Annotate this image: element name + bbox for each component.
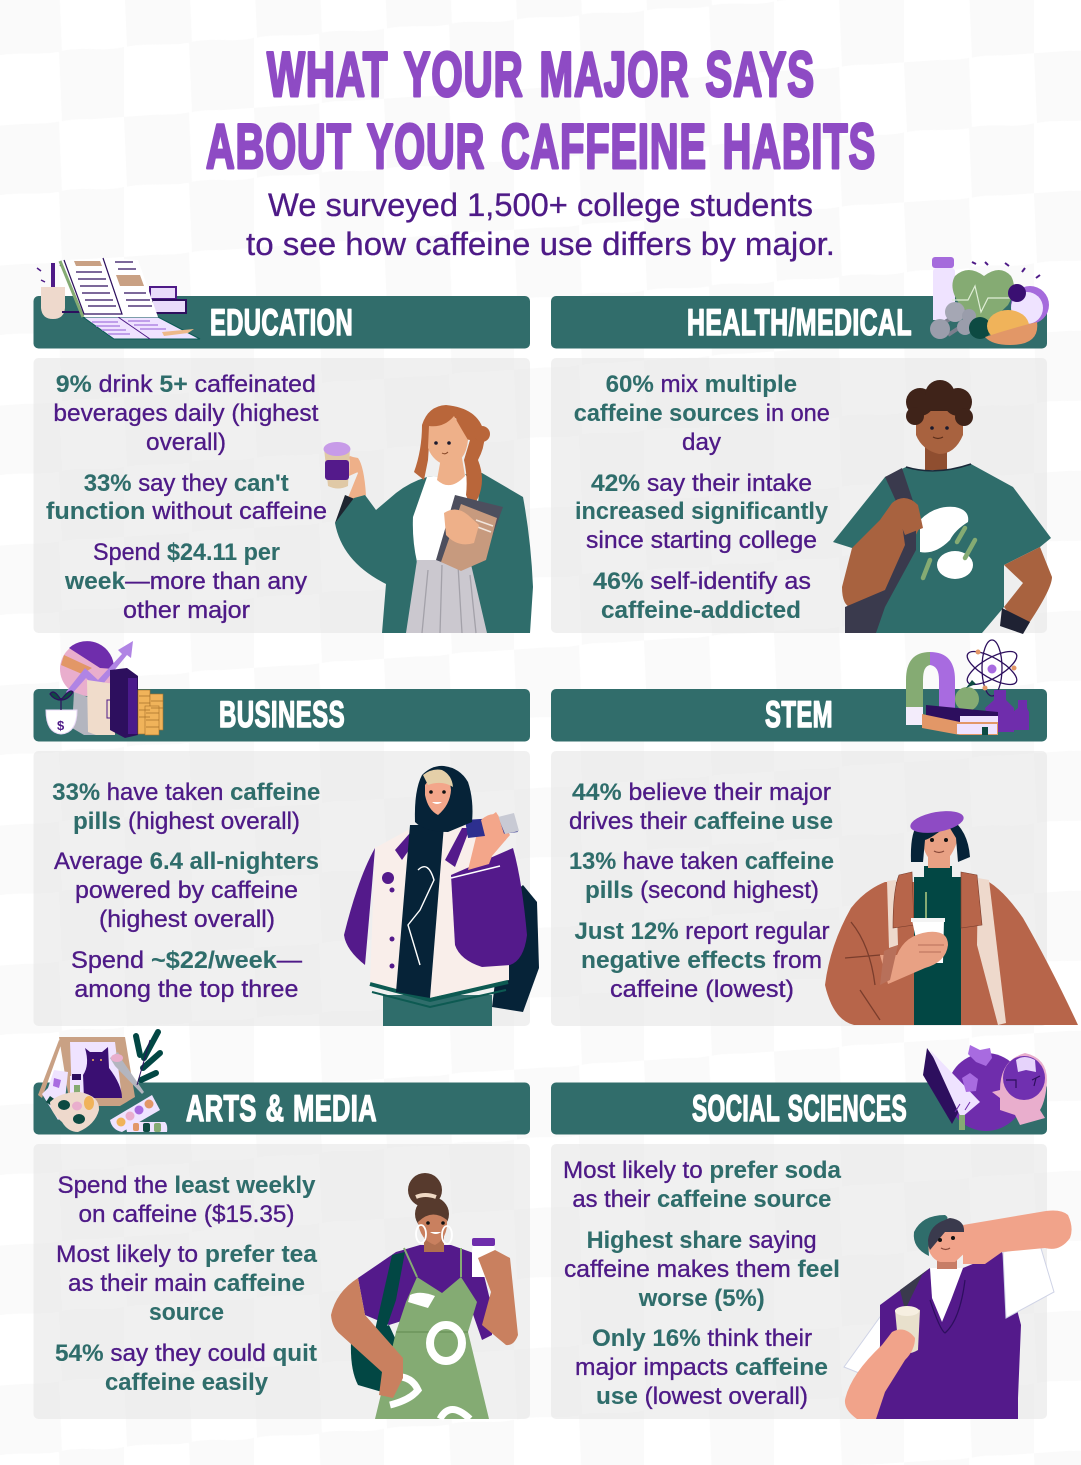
text: arts stats: on caffeine ($15.35) [78, 1201, 294, 1228]
body card [551, 1144, 1047, 1419]
text: education stats: Spend $24.11 per [93, 539, 280, 566]
text: social sciences stats: Highest share saying [587, 1227, 817, 1254]
heading: SOCIAL SCIENCES [692, 1088, 907, 1129]
panel: social sciences [551, 1045, 1072, 1419]
text: social sciences stats: use (lowest overall) [596, 1383, 808, 1410]
text: health stats: 46% self-identify as [593, 568, 811, 595]
text: education stats: 9% drink 5+ caffeinated [56, 371, 316, 398]
text: stem stats [569, 779, 834, 1003]
text: business stats: (highest overall) [99, 906, 275, 933]
icon: student with coffee [324, 405, 533, 633]
body card [34, 358, 530, 633]
title [206, 40, 876, 182]
text: stem stats: 13% have taken caffeine [569, 848, 834, 875]
text: arts stats [55, 1172, 318, 1396]
icon: student with energy drink [344, 766, 539, 1026]
text: health stats: increased significantly [575, 498, 829, 525]
text: business stats: powered by caffeine [75, 877, 298, 904]
header bar [551, 1082, 1047, 1134]
body card [34, 1144, 530, 1419]
text: health stats: 60% mix multiple [606, 371, 797, 398]
header bar [34, 689, 530, 742]
text: business stats: Spend ~$22/week — [71, 947, 302, 974]
text: arts stats: Most likely to prefer tea [56, 1241, 318, 1268]
heading: HEALTH/MEDICAL [687, 302, 912, 343]
icon: magnet, atom and books [906, 640, 1029, 735]
body card [551, 358, 1047, 633]
header bar [551, 296, 1047, 348]
text: education stats [46, 371, 327, 624]
icon: book and thinking head [923, 1045, 1047, 1131]
text: health stats: 42% say their intake [591, 470, 812, 497]
icon: books, chart and coins: $ [57, 718, 65, 733]
header bar [34, 1082, 530, 1134]
text: social sciences stats: worse (5%) [638, 1285, 765, 1312]
icon: curly hair [906, 380, 973, 426]
text: health stats: since starting college [586, 527, 817, 554]
heading: ARTS & MEDIA [186, 1088, 377, 1129]
body card [551, 751, 1047, 1026]
subtitle [246, 187, 835, 262]
heading: BUSINESS [219, 694, 345, 735]
text: stem stats: drives their caffeine use [569, 808, 833, 835]
text: education stats: function without caffeine [46, 498, 327, 525]
text: education stats: overall) [146, 429, 226, 456]
icon: easel, palette and leaves [38, 1032, 167, 1132]
text: stem stats: pills (second highest) [585, 877, 819, 904]
text: social sciences stats [563, 1157, 842, 1410]
icon: student with tea [331, 1173, 518, 1419]
icon: student with iced coffee [825, 807, 1078, 1025]
panel: business [34, 641, 539, 1026]
text: arts stats: Spend the least weekly [58, 1172, 316, 1199]
text: business stats: 33% have taken caffeine [52, 779, 320, 806]
subtitle: We surveyed 1,500+ college students [268, 187, 813, 223]
heading: EDUCATION [210, 302, 353, 343]
text: social sciences stats: caffeine makes them feel [564, 1256, 840, 1283]
text: health stats [574, 371, 830, 624]
icon: student with backpack strap [833, 380, 1052, 634]
text: business stats: pills (highest overall) [73, 808, 300, 835]
text: education stats: week—more than any [64, 568, 307, 595]
text: stem stats: Just 12% report regular [574, 918, 830, 945]
header bar [551, 689, 1047, 742]
icon: books, chart and coins [46, 641, 163, 738]
text: health stats: caffeine sources in one [574, 400, 830, 427]
panel: education [34, 258, 533, 633]
panel: stem [551, 640, 1078, 1026]
text: business stats: among the top three [74, 976, 298, 1003]
icon: student thinking with coffee [844, 1211, 1072, 1419]
text: stem stats: 44% believe their major [572, 779, 831, 806]
text: education stats: beverages daily (highest [53, 400, 319, 427]
text: arts stats: as their main caffeine [68, 1270, 305, 1297]
body card [34, 751, 530, 1026]
text: business stats: Average 6.4 all-nighters [54, 848, 319, 875]
text: arts stats: 54% say they could quit [55, 1340, 317, 1367]
text: arts stats: source [149, 1299, 224, 1326]
text: social sciences stats: as their caffeine source [572, 1186, 831, 1213]
panel: health/medical [551, 257, 1052, 634]
icon: books [37, 258, 200, 339]
text: social sciences stats: Most likely to prefer soda [563, 1157, 842, 1184]
header bar [34, 296, 530, 348]
text: stem stats: negative effects from [581, 947, 822, 974]
text: health stats: caffeine-addicted [601, 597, 801, 624]
text: stem stats: caffeine (lowest) [610, 976, 794, 1003]
heading: STEM [765, 694, 833, 735]
text: education stats: other major [123, 597, 250, 624]
text: arts stats: caffeine easily [105, 1369, 269, 1396]
subtitle: to see how caffeine use differs by major. [246, 226, 835, 262]
icon: health items [930, 257, 1049, 345]
text: business stats [52, 779, 320, 1003]
panel: arts and media [34, 1032, 530, 1419]
text: health stats: day [682, 429, 721, 456]
text: social sciences stats: major impacts caffeine [575, 1354, 828, 1381]
text: education stats: 33% say they can't [84, 470, 289, 497]
text: social sciences stats: Only 16% think their [592, 1325, 812, 1352]
